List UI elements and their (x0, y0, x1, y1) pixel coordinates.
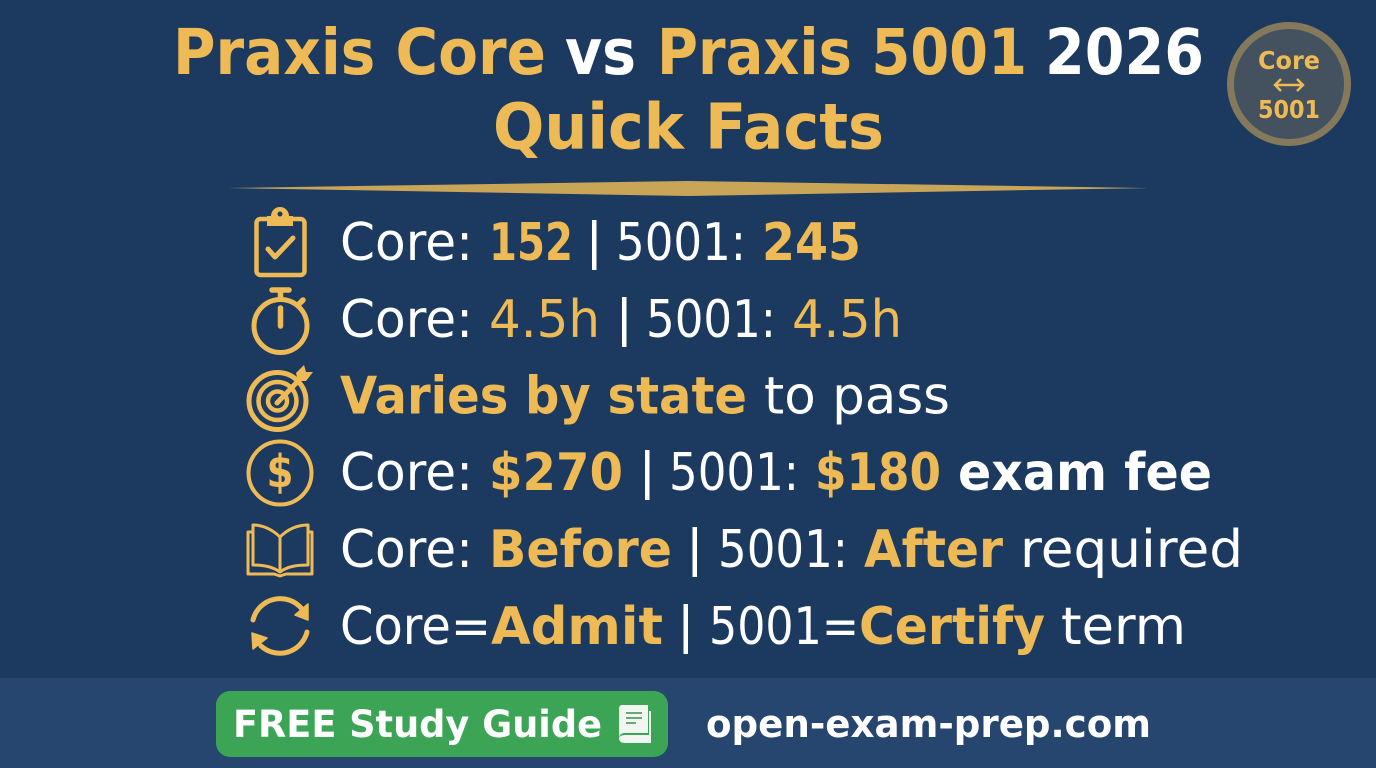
badge: Core to 5001: 5001 (1258, 95, 1320, 124)
icon: open book (248, 525, 312, 576)
icon: book (619, 705, 651, 743)
row: exam fee: 5001: (669, 443, 799, 503)
row: timing: required (1020, 520, 1243, 580)
row: timing: Before (489, 520, 672, 580)
row: question counts: Core: (340, 213, 473, 273)
row: passing score: to pass (764, 366, 950, 426)
icon: stopwatch (254, 290, 307, 352)
button: free study guide: FREE Study Guide (233, 703, 602, 746)
row: test time: Core: (340, 290, 473, 350)
title: Quick Facts (493, 90, 884, 164)
row: exam fee: Core: (340, 443, 473, 503)
website url: open-exam-prep.com (706, 702, 1151, 746)
row: question counts: 245 (762, 213, 861, 273)
row: exam fee: exam fee (958, 443, 1212, 503)
title (173, 16, 1204, 164)
row: purpose: term (1061, 597, 1186, 657)
row: passing score: Varies by state (340, 366, 747, 426)
row: purpose: Core= (340, 597, 491, 657)
row: timing: Core: (340, 520, 473, 580)
row: timing (340, 520, 1243, 580)
row: purpose (340, 597, 1186, 657)
row: timing: 5001: (718, 520, 848, 580)
title: 2026 (1045, 16, 1204, 89)
row: test time: 4.5h (489, 290, 600, 350)
row: question counts (340, 213, 861, 273)
title: Praxis Core (173, 16, 546, 89)
row: test time (340, 290, 902, 350)
row: purpose: 5001= (709, 597, 859, 657)
row: question counts: 152 (489, 213, 573, 273)
row: test time: 5001: (646, 290, 776, 350)
title: vs (565, 16, 636, 89)
row: question counts: 5001: (616, 213, 746, 273)
row: purpose: Certify (859, 597, 1045, 657)
footer bar (0, 678, 1376, 768)
icon: dollar coin: $ (266, 445, 294, 498)
icon: cycle arrows (252, 599, 308, 653)
icon: clipboard with check (256, 207, 304, 275)
row: exam fee (340, 443, 1212, 503)
badge: Core to 5001 (1230, 26, 1348, 142)
title: Praxis 5001 (657, 16, 1027, 89)
icon: dollar coin (248, 442, 312, 504)
row: exam fee: $270 (489, 443, 623, 503)
button: free study guide (216, 691, 668, 757)
row: exam fee: $180 (815, 443, 941, 503)
row: test time: 4.5h (792, 290, 902, 350)
badge: Core to 5001: Core (1258, 46, 1320, 75)
row: purpose: Admit (491, 597, 663, 657)
icon: target with arrow (249, 365, 313, 430)
row: timing: After (864, 520, 1003, 580)
divider (228, 181, 1148, 196)
